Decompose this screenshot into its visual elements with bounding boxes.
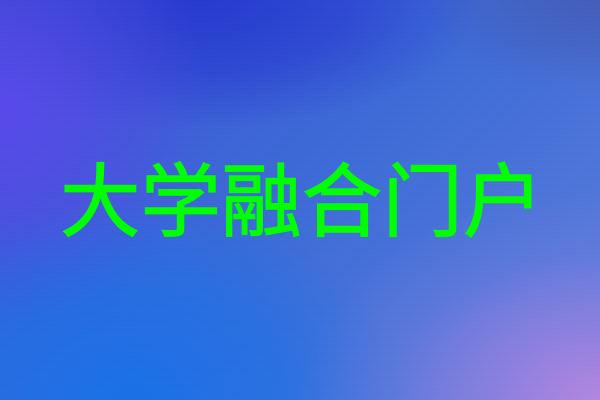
title: 大学融合门户 (60, 158, 544, 247)
